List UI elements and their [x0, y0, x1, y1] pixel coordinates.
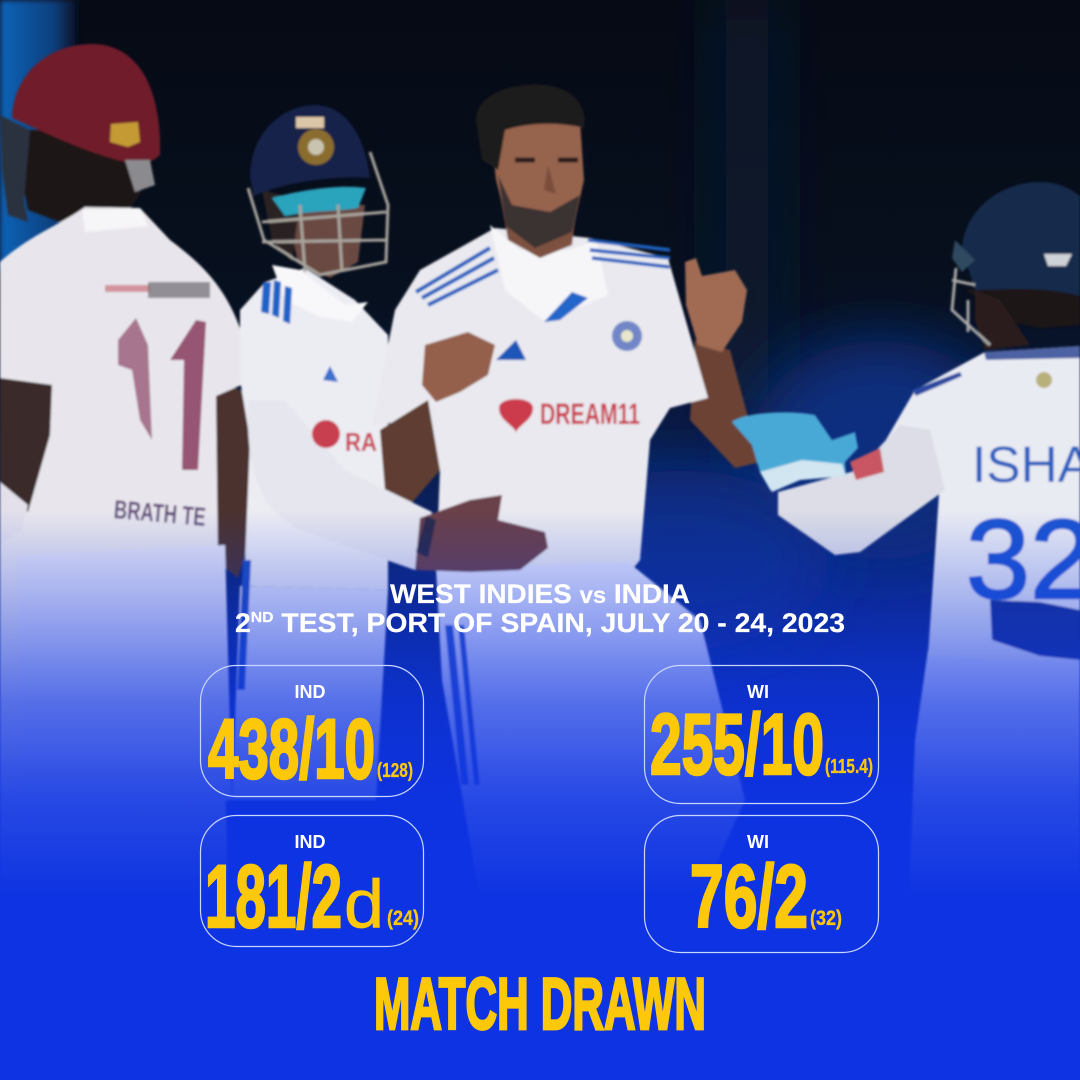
player: Ashwin, India bowler: DREAM11 — [540, 398, 640, 431]
score card: West Indies first innings: WI — [747, 682, 769, 702]
far forearm and fist — [690, 340, 760, 468]
dark patch on shirt — [990, 600, 1080, 660]
Dream11 sponsor logo — [499, 399, 533, 432]
wicketkeeping glove — [732, 412, 858, 490]
trousers — [436, 562, 745, 900]
collar — [490, 225, 608, 322]
score card: India first innings — [200, 666, 424, 796]
India crest — [612, 321, 642, 351]
blue shoulder stripes — [261, 280, 292, 324]
score card: West Indies second innings — [644, 816, 878, 952]
grille — [952, 268, 990, 345]
title: match details: 2 — [235, 608, 250, 638]
helmet grille — [248, 152, 388, 275]
player: Ashwin, India bowler — [372, 85, 760, 900]
title: match details: WEST INDIES vs INDIA — [390, 579, 690, 609]
score card: India second innings: d — [344, 866, 384, 942]
title: match details: ND — [251, 609, 274, 626]
score card: West Indies second innings: 76/2 — [690, 846, 808, 946]
torso — [372, 228, 708, 580]
player: West Indies batter seen from behind — [0, 44, 258, 1000]
near arm and fist — [380, 400, 440, 505]
score card: India second innings: 181/2 — [205, 846, 342, 946]
sleeve arm — [778, 425, 945, 555]
score card: West Indies first innings: (115.4) — [825, 756, 873, 778]
score card: India first innings: (128) — [377, 760, 413, 782]
navy helmet — [250, 105, 370, 196]
West Indies shirt number and name: BRATH TE — [113, 494, 207, 532]
score card: West Indies first innings — [644, 666, 878, 804]
head and hair — [965, 280, 1080, 328]
maroon helmet — [12, 44, 160, 163]
score card: India first innings: 438/10 — [208, 702, 375, 796]
neck, head and beard — [500, 195, 578, 258]
West Indies shirt number and name — [105, 282, 210, 532]
shoulder stripes — [416, 248, 498, 305]
score card: West Indies second innings: (32) — [810, 907, 842, 930]
score card: India second innings: (24) — [387, 907, 419, 930]
face and neck — [285, 205, 365, 278]
player: Ishan Kishan, India wicketkeeper — [732, 182, 1080, 1000]
blue fade overlay — [0, 510, 1080, 1080]
navy keeper helmet — [962, 182, 1080, 296]
score card: West Indies first innings: 255/10 — [650, 697, 824, 793]
fielder's sleeve, hand and chest logo in front of the bowler — [248, 400, 548, 572]
trousers — [905, 650, 1080, 1000]
shirt body — [880, 346, 1080, 660]
title: match details — [235, 579, 845, 638]
player: India fielder in helmet with sunglasses — [232, 105, 388, 800]
score card: West Indies second innings: WI — [747, 832, 769, 852]
result: match drawn: MATCH DRAWN — [374, 964, 706, 1045]
title: match details: TEST, PORT OF SPAIN, JULY 20 - 24, 2023 — [274, 608, 845, 638]
fielder's sleeve, hand and chest logo in front of the bowler: RA — [345, 427, 377, 457]
sunglasses — [272, 187, 366, 216]
score card: India second innings: IND — [294, 832, 326, 852]
trousers with side stripes — [232, 586, 388, 800]
adidas logo — [496, 340, 526, 360]
score card: India first innings: IND — [294, 682, 326, 702]
left arm — [0, 378, 52, 512]
